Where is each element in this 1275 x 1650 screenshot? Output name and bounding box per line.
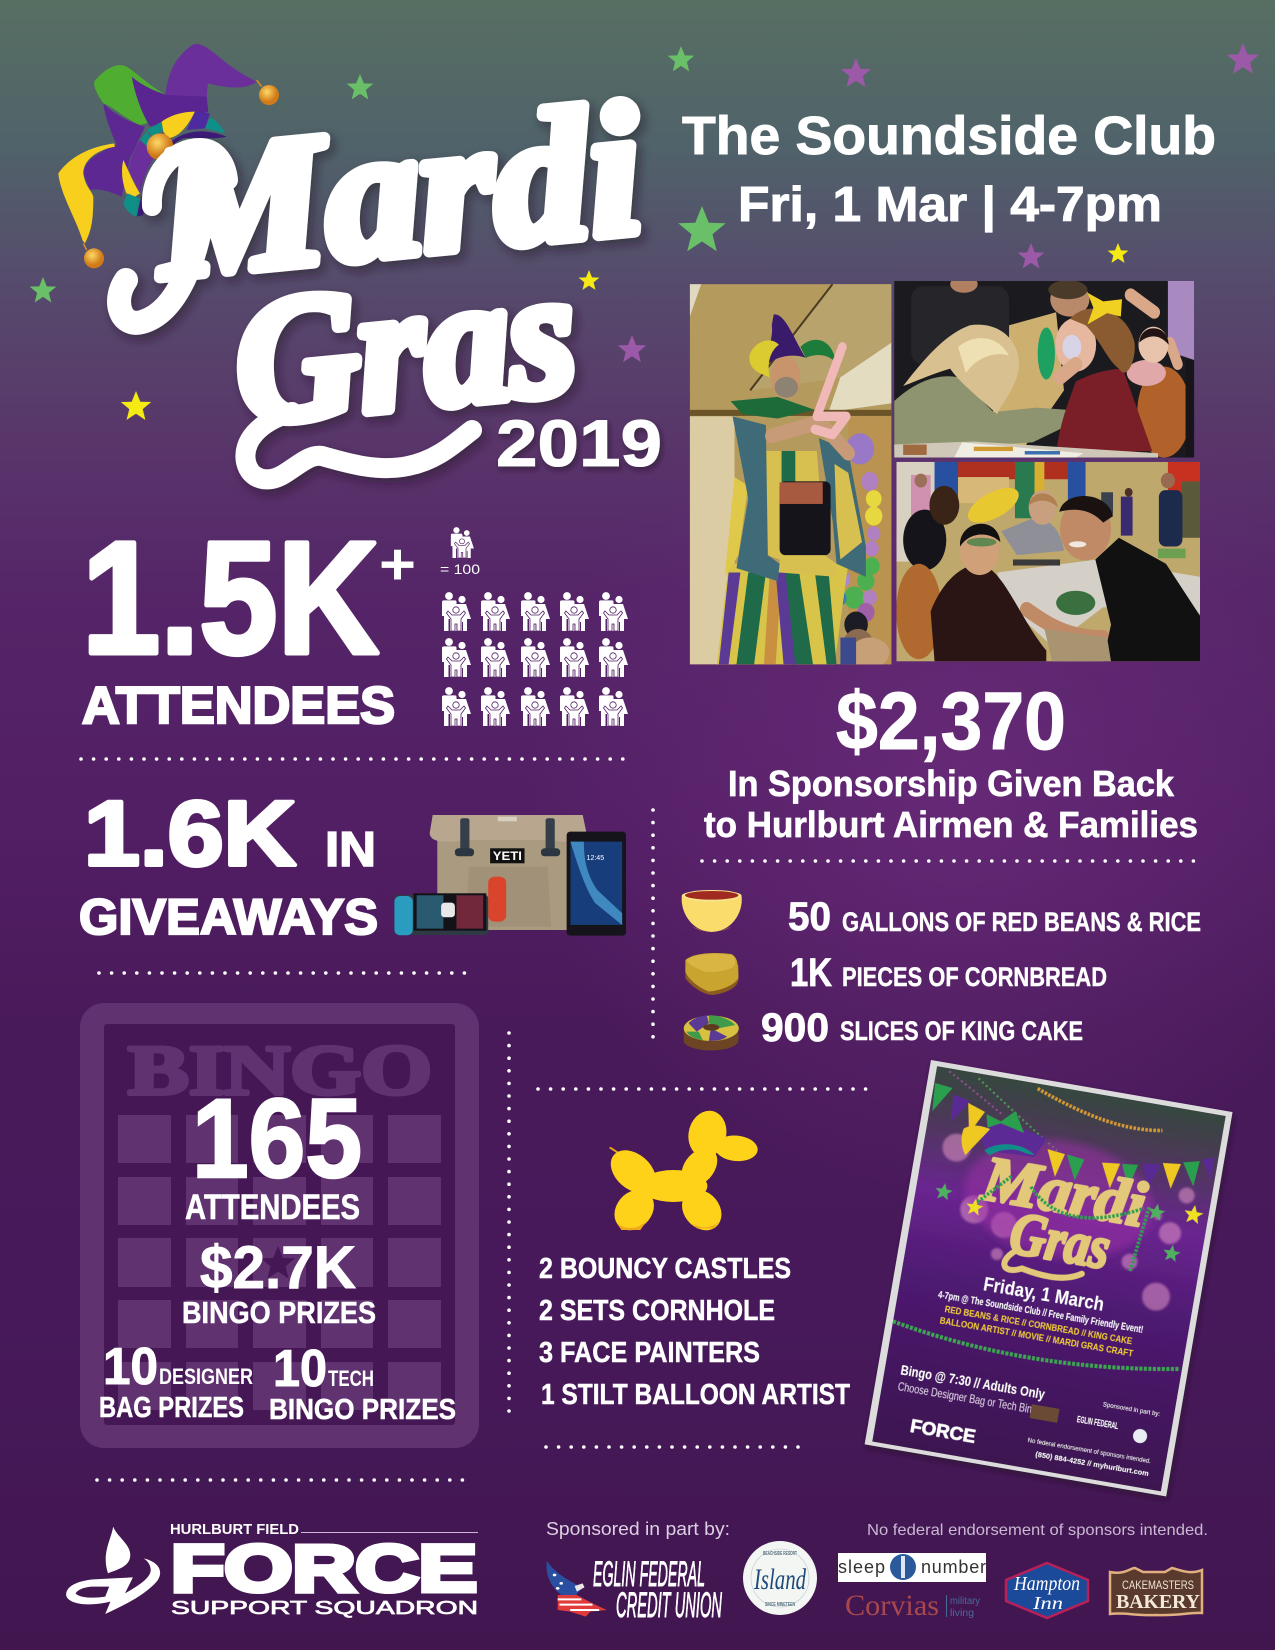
poster stars [930,1161,1205,1265]
stat: sponsorship [704,676,1198,845]
bingo heading watermark: BINGO [128,1032,432,1110]
bingo stats: BINGO PRIZES [182,1295,376,1330]
stars [30,43,1259,420]
year: 2019: 2019 [496,406,662,480]
bingo stats: 10 [273,1340,327,1398]
bingo stats: TECH [328,1366,374,1391]
food stat: king cake [761,1006,1083,1050]
logo: Sleep Number: sleep [838,1557,885,1577]
poster: event flyer [865,1060,1233,1496]
title: Mardi Gras [119,63,650,479]
bingo stats: BINGO PRIZES [269,1394,456,1426]
logo: Island: BEACHSIDE RESORT [763,1551,797,1557]
poster jester hat [959,1103,1051,1169]
stat: 1.6K in giveaways: 1.6K [84,783,296,885]
stat: sponsorship: $2,370 [836,676,1066,767]
logo: Hurlburt Field Force Support Squadron [66,1521,478,1618]
food stat: red beans and rice: GALLONS OF RED BEANS & RICE [842,907,1201,937]
text: EGLIN FEDERAL [593,1555,705,1594]
logo: Hurlburt Field Force Support Squadron: SUPPORT SQUADRON [171,1598,478,1618]
icon: cornbread [685,953,738,995]
bingo stats: 10 [103,1338,158,1396]
stat: 1.5K attendees: ATTENDEES [82,677,395,735]
poster title: Mardi [977,1142,1152,1240]
activities list: 2 SETS CORNHOLE [539,1295,775,1327]
bingo stats: $2.7K [200,1234,356,1301]
photo: face painting [894,275,1194,458]
stat: 1.5K attendees: + [379,532,416,597]
logo: Corvias: living [950,1608,974,1619]
logo: Sleep Number: number [921,1557,986,1577]
stat: 1.5K attendees: 1.5K [82,508,379,687]
bingo stats: DESIGNER [159,1364,253,1389]
stat: 1.6K in giveaways: IN [325,823,376,877]
photo: stilt balloon artist [690,284,891,668]
food stat: king cake: 900 [761,1006,829,1050]
logo: Hampton Inn: Hampton [1013,1573,1080,1595]
logo: Hampton Inn [1006,1563,1088,1618]
food stat: king cake: SLICES OF KING CAKE [840,1016,1083,1046]
logo: Corvias: military [950,1596,980,1607]
date and time: Fri, 1 Mar | 4-7pm [738,178,1162,232]
logo: Hurlburt Field Force Support Squadron: FORCE [171,1531,477,1605]
title: Mardi Gras: Mardi [143,63,650,318]
photo: families at tables [896,462,1200,661]
poster details: EGLIN FEDERAL [1076,1414,1120,1431]
legend: family icon equals 100 [440,527,480,577]
title: Mardi Gras: Gras [226,231,584,462]
poster bokeh lights [921,1131,1198,1314]
icon: balloon dog [602,1110,762,1233]
logo: Corvias: Corvias [845,1589,939,1622]
stat: 1.6K in giveaways: GIVEAWAYS [79,889,378,945]
activities list: 1 STILT BALLOON ARTIST [541,1379,850,1411]
bingo stats: 165 [192,1076,362,1201]
poster details: Sponsored in part by: [1102,1402,1161,1418]
logo: Island: SINCE MINETEEN [765,1602,795,1608]
logo: Island [743,1541,817,1615]
food stat: red beans and rice [788,895,1201,939]
logo: Cakemasters Bakery: BAKERY [1116,1591,1201,1613]
bingo stats [99,1076,456,1426]
poster bunting [923,1083,1219,1205]
venue heading: The Soundside Club [682,106,1216,166]
logo: Cakemasters Bakery: CAKEMASTERS [1122,1578,1194,1592]
logo: Hampton Inn: Inn [1032,1593,1063,1613]
stat: 1.6K in giveaways [79,783,378,945]
poster details: Choose Designer Bag or Tech Bingo [897,1379,1043,1418]
logo: Hurlburt Field Force Support Squadron: HURLBURT FIELD [170,1521,299,1538]
stat: sponsorship: to Hurlburt Airmen & Families [704,804,1198,845]
bingo stats: ATTENDEES [185,1188,360,1227]
logo: Island: Island [753,1563,807,1596]
food stat: cornbread [790,951,1107,995]
legend: family icon equals 100: = 100 [440,561,480,577]
poster details: FORCE [909,1416,977,1447]
icon: jester hat [58,44,279,268]
poster title [968,1142,1152,1291]
poster details: Friday, 1 March [982,1274,1106,1316]
poster details: Bingo @ 7:30 // Adults Only [900,1362,1046,1402]
sponsors heading: Sponsored in part by: [546,1519,730,1539]
activities list: 2 BOUNCY CASTLES [539,1253,791,1285]
icon: bowl of red beans [682,890,742,932]
image: giveaway prizes [394,815,626,936]
logo: Eglin Federal Credit Union [546,1555,722,1625]
logo: Corvias [845,1589,980,1622]
food stat: red beans and rice: 50 [788,895,831,939]
activities list [539,1253,850,1411]
stat: sponsorship: In Sponsorship Given Back [728,763,1175,804]
text: CREDIT UNION [616,1586,722,1625]
pictogram: attendee families [442,592,628,726]
poster details [874,1260,1190,1480]
poster title: Gras [1005,1200,1115,1282]
icon: king cake [684,1015,739,1050]
poster details: BALLOON ARTIST // MOVIE // MARDI GRAS CRAFT [939,1315,1134,1359]
logo: Cakemasters Bakery [1110,1568,1202,1615]
panel: bingo card [80,1003,479,1448]
food stat: cornbread: 1K [790,951,832,995]
food stat: cornbread: PIECES OF CORNBREAD [842,962,1107,992]
activities list: 3 FACE PAINTERS [539,1337,760,1369]
bingo stats: BAG PRIZES [99,1392,244,1424]
image: giveaway prizes: YETI [493,849,522,863]
poster details: RED BEANS & RICE // CORNBREAD // KING CAKE [944,1304,1133,1346]
poster details: 4-7pm @ The Soundside Club // Free Family Friendly Event! [937,1290,1144,1336]
image: giveaway prizes: 12:45 [587,853,605,862]
icon: flame and swoosh [66,1527,160,1614]
logo: Sleep Number [838,1553,986,1582]
poster details: No federal endorsement of sponsors intended. [1027,1438,1152,1465]
disclaimer: No federal endorsement of sponsors intended. [867,1522,1208,1539]
poster details: (850) 884-4252 // myhurlburt.com [1035,1452,1149,1478]
